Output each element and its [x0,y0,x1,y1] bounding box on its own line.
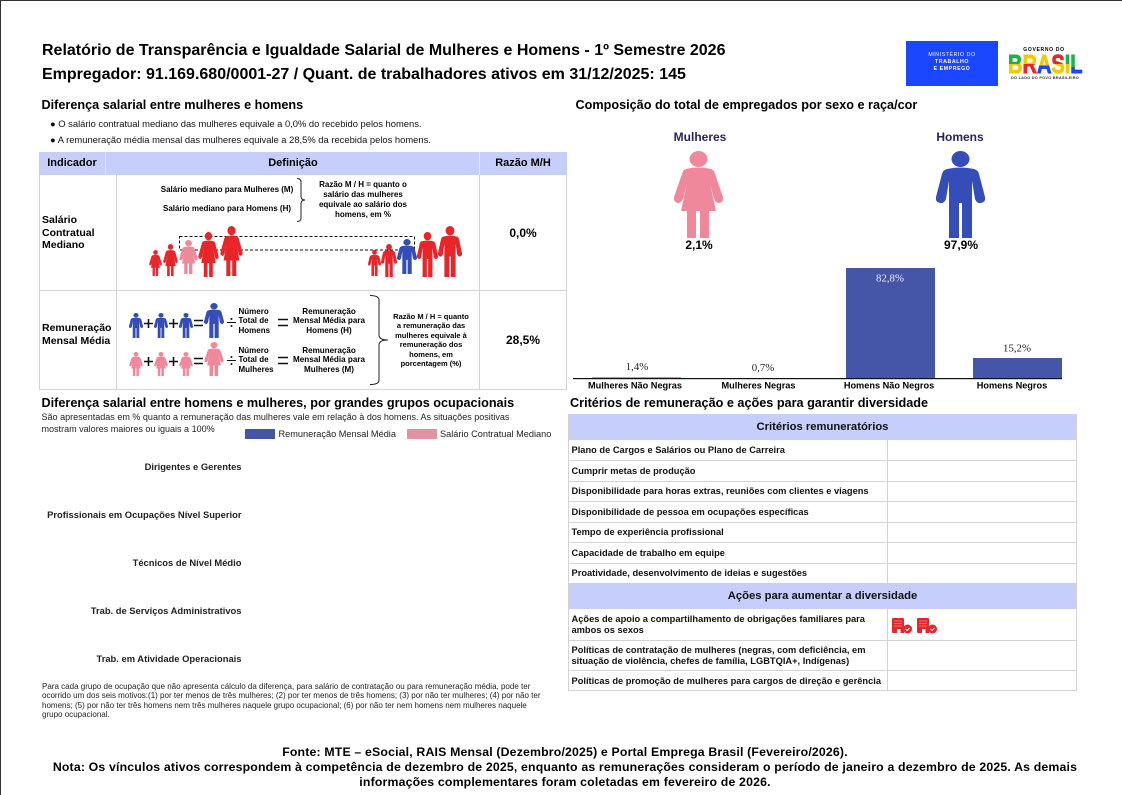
logo: governo do brasil: R [1022,49,1037,79]
icon: homem [936,151,985,238]
text: número total de mulheres: Total de [238,355,269,364]
text: salário mediano labels [161,185,293,213]
heading: composição: Composição do total de empregados por sexo e raça/cor [576,98,917,112]
title: Empregador: 91.169.680/0001-27 / Quant. de trabalhadores ativos em 31/12/2025: 145 [42,66,686,82]
text: número total de homens: Número [238,307,269,316]
bar chart: composição por sexo e raça: Mulheres Não Negras [588,380,682,390]
logo: governo do brasil: GOVERNO DO [1023,47,1065,53]
heading: diferença salarial: Diferença salarial entre mulheres e homens [42,98,303,112]
panel: tabela de indicadores: Remuneração [42,322,111,334]
value: homens 97,9%: 97,9% [944,238,978,252]
panel: tabela de critérios [568,414,1077,691]
text: razão M/H mediano: equivale ao salário dos [319,200,407,209]
panel: tabela de indicadores [39,152,567,390]
panel: tabela de indicadores: Mensal Média [42,334,110,346]
text: remuneração mulheres: Mulheres (M) [304,365,354,374]
occupational groups labels [47,462,242,664]
legend [245,429,551,439]
panel: tabela de indicadores: 0,0% [509,226,537,240]
footnote: grupos: homens; (5) por não ter três homens nem três mulheres naquele grupo ocupacional; (6) por não ter nem homens nem mulheres naquele [42,701,527,710]
title: Relatório de Transparência e Igualdade Salarial de Mulheres e Homens - 1º Semestre 2026 [42,42,725,59]
brace: remuneração [370,295,388,385]
text: razão M/H mediano: homens, em % [335,210,391,219]
panel: tabela de critérios: ambos os sexos [572,625,644,635]
text: salário mediano labels: Salário mediano para Homens (H) [163,204,291,213]
panel: tabela de critérios: Disponibilidade para horas extras, reuniões com clientes e viagens [572,486,869,496]
logo: ministério [906,41,998,86]
text: razão M/H mediano: salário das mulheres [323,190,403,199]
panel: tabela de critérios: Proatividade, desenvolvimento de ideias e sugestões [572,568,807,578]
panel: tabela de indicadores: Razão M/H [495,157,551,169]
text: razão M/H remuneração: Razão M / H = quanto [393,312,469,321]
text: razão M/H remuneração: mulheres equivale à [395,331,467,340]
bar chart: composição por sexo e raça: Mulheres Negras [721,380,796,390]
logo: ministério: MINISTÉRIO DO [928,52,976,58]
text: razão M/H remuneração [393,312,469,368]
panel: tabela de critérios: Políticas de contratação de mulheres (negras, com deficiência, em [572,645,866,655]
bar chart: composição por sexo e raça: Homens Negros [977,380,1047,390]
panel: tabela de indicadores: Indicador [47,157,97,169]
text: número total de mulheres: Número [238,346,269,355]
panel: tabela de indicadores: Definição [268,157,318,169]
bar chart: composição por sexo e raça: 15,2% [1003,342,1031,354]
bullets: ● O salário contratual mediano das mulheres equivale a 0,0% do recebido pelos homens. [50,118,422,129]
text: remuneração mulheres: Mensal Média para [293,355,365,364]
text: razão M/H remuneração: remuneração dos [400,340,462,349]
footnote: grupos: grupo ocupacional. [42,710,110,719]
text: razão M/H remuneração: a remuneração das [397,321,465,330]
text: número total de homens: Homens [238,326,270,335]
panel: tabela de critérios: Cumprir metas de produção [572,466,695,476]
panel: tabela de indicadores: Contratual [42,226,94,238]
panel: tabela de indicadores: Salário [42,214,77,226]
bar chart: composição por sexo e raça: 82,8% [876,272,904,284]
heading: grupos ocupacionais: Diferença salarial entre homens e mulheres, por grandes grupos ocupacionais [42,396,514,410]
logo: ministério: E EMPREGO [934,66,970,72]
logo: ministério: TRABALHO [935,59,969,65]
text: remuneração homens: Remuneração [302,307,356,316]
text: remuneração homens: Mensal Média para [293,316,365,325]
legend: Salário Contratual Mediano [440,429,551,439]
text: número total de mulheres: Mulheres [238,365,274,374]
footer: fonte e nota: Fonte: MTE – eSocial, RAIS Mensal (Dezembro/2025) e Portal Emprega Brasil (Fevereiro/2026). [282,745,848,759]
logo: governo do brasil: A [1037,49,1052,79]
table header: critérios: Critérios remuneratórios [757,421,888,433]
brace: salário mediano [297,178,305,222]
text: razão M/H mediano: Razão M / H = quanto o [319,180,407,188]
panel: tabela de critérios: Ações de apoio a compartilhamento de obrigações familiares para [572,614,865,624]
bullets: ● A remuneração média mensal das mulheres equivale a 28,5% da recebida pelos homens. [50,134,431,145]
text: remuneração homens [293,307,366,335]
panel: tabela de critérios: situação de violência, chefes de família, LGBTQIA+, Indígenas) [572,656,849,666]
text: remuneração homens: Homens (H) [306,326,352,335]
footer: fonte e nota [53,745,1077,789]
text: razão M/H remuneração: homens, em [409,350,453,359]
logo: governo do brasil: DO LADO DO POVO BRASILEIRO [1011,75,1079,80]
panel: tabela de critérios: Tempo de experiência profissional [572,527,724,537]
panel: tabela de critérios: Plano de Cargos e Salários ou Plano de Carreira [572,445,785,455]
logo: governo do brasil [1008,47,1083,80]
panel: tabela de critérios: Políticas de promoção de mulheres para cargos de direção e gerência [572,676,881,686]
title [42,42,725,82]
occupational groups labels: Técnicos de Nível Médio [133,558,242,568]
icons: empresa com selo [892,618,937,634]
text: razão M/H mediano [319,180,407,219]
footnote: grupos: Para cada grupo de ocupação que não apresenta cálculo da diferença, para salário de contratação ou para remuneração média, pode ter [42,682,530,691]
occupational groups labels: Profissionais em Ocupações Nível Superior [47,510,242,520]
label: mulheres: Mulheres [674,130,726,144]
text: número total de mulheres [238,346,274,374]
occupational groups labels: Dirigentes e Gerentes [145,462,242,472]
footnote: grupos: ocorrido um dos seis motivos:(1) por ter menos de três mulheres; (2) por ter menos de três homens; (3) por não ter mulheres; (4) por não ter [42,691,541,700]
text: remuneração mulheres: Remuneração [302,346,356,355]
text: descrição grupos [42,412,510,434]
panel: tabela de indicadores: Mediano [42,239,85,251]
text: descrição grupos: mostram valores maiores ou iguais a 100% [42,424,215,434]
footer: fonte e nota: informações complementares foram coletadas em fevereiro de 2026. [359,775,771,789]
table header [39,152,567,175]
logo: governo do brasil: I [1065,49,1070,79]
panel: tabela de indicadores: 28,5% [506,333,540,347]
footnote: grupos [42,682,541,719]
table header: ações [568,583,1077,609]
occupational groups labels: Trab. de Serviços Administrativos [91,606,242,616]
bar chart: composição por sexo e raça: 1,4% [626,361,648,373]
panel: tabela de critérios: Capacidade de trabalho em equipe [572,548,725,558]
bar chart: composição por sexo e raça: Homens Não Negros [844,380,934,390]
footer: fonte e nota: Nota: Os vínculos ativos correspondem à competência de dezembro de 2025, enquanto as remunerações consideram o período de janeiro a dezembro de 2025. As demais [53,760,1077,774]
text: número total de homens [238,307,270,335]
text: salário mediano labels: Salário mediano para Mulheres (M) [161,185,293,194]
icon: mulher [674,151,724,238]
legend: Remuneração Mensal Média [278,429,396,439]
logo: governo do brasil: B [1008,49,1022,79]
text: descrição grupos: São apresentadas em % quanto a remuneração das mulheres vale em relação à dos homens. As situações positivas [42,412,509,422]
logo: governo do brasil: L [1070,49,1083,79]
bullets [50,118,431,145]
text: remuneração mulheres [293,346,366,374]
text: número total de homens: Total de [238,316,269,325]
panel: tabela de critérios: Disponibilidade de pessoa em ocupações específicas [572,507,809,517]
bar chart: composição por sexo e raça: 0,7% [752,362,774,374]
logo: governo do brasil: S [1051,49,1065,79]
occupational groups labels: Trab. em Atividade Operacionais [96,654,242,664]
label: homens: Homens [936,130,984,144]
table header: ações: Ações para aumentar a diversidade [728,590,917,602]
heading: critérios: Critérios de remuneração e ações para garantir diversidade [570,396,928,410]
table header: critérios [568,414,1077,440]
text: razão M/H remuneração: porcentagem (%) [401,359,461,368]
value: mulheres 2,1%: 2,1% [685,238,713,252]
